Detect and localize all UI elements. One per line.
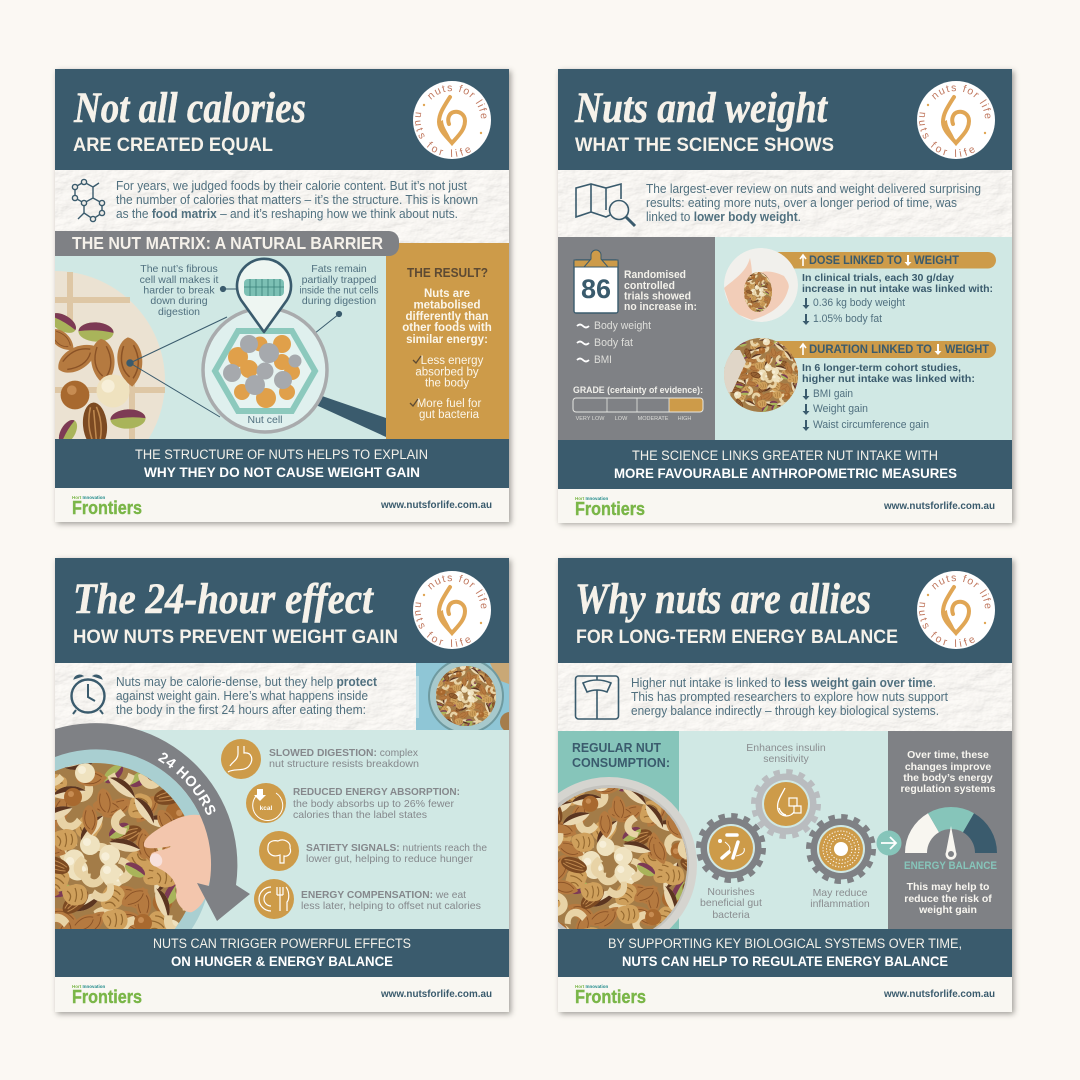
intro text: energy balance indirectly – through key biological systems. bbox=[631, 704, 939, 718]
footer: Frontiers bbox=[575, 987, 646, 1007]
duration results: BMI gain bbox=[813, 388, 853, 400]
header band bbox=[55, 69, 509, 170]
arrow: gears to gauge bbox=[876, 830, 902, 856]
footer: Hort Innovation bbox=[72, 495, 105, 500]
footer: www.nutsforlife.com.au bbox=[380, 988, 492, 1000]
grey trials panel bbox=[558, 237, 715, 440]
no-change list bbox=[577, 320, 651, 366]
intro text bbox=[646, 182, 981, 224]
photo: bowl of nuts bbox=[416, 663, 509, 730]
trials text: no increase in: bbox=[624, 301, 697, 313]
conclusion band: THE SCIENCE LINKS GREATER NUT INTAKE WITH bbox=[632, 448, 938, 463]
panel: the result: Less energy bbox=[421, 355, 484, 367]
conclusion band: MORE FAVOURABLE ANTHROPOMETRIC MEASURES bbox=[614, 466, 957, 481]
outcome text: Over time, these bbox=[907, 749, 989, 761]
panel: not all calories bbox=[54, 68, 514, 528]
no-change list: Body fat bbox=[594, 337, 633, 349]
GRADE scale: MODERATE bbox=[638, 416, 669, 422]
intro text: the number of calories that matters – it’s the structure. This is known bbox=[116, 193, 478, 207]
footer: Hort Innovation bbox=[72, 984, 105, 989]
panel: the result: similar energy: bbox=[406, 334, 488, 346]
callout: fats trapped: Fats remain bbox=[311, 263, 367, 275]
step: satiety signals bbox=[259, 831, 487, 871]
gear labels: bacteria bbox=[712, 909, 750, 921]
header band bbox=[55, 558, 509, 663]
duration pill bbox=[760, 341, 996, 358]
section heading tab: THE NUT MATRIX: A NATURAL BARRIER bbox=[72, 233, 383, 253]
callout: fibrous cell wall: The nut’s fibrous bbox=[140, 263, 218, 275]
outcome text: regulation systems bbox=[900, 783, 996, 795]
trials text bbox=[624, 269, 697, 313]
duration results bbox=[802, 388, 929, 431]
outcome note bbox=[904, 881, 992, 916]
title: Nuts and weight bbox=[574, 85, 829, 132]
step: satiety signals: SATIETY SIGNALS: nutrients reach the bbox=[306, 842, 487, 854]
conclusion band: NUTS CAN TRIGGER POWERFUL EFFECTS bbox=[153, 936, 411, 951]
gauge: energy balance: ENERGY BALANCE bbox=[904, 860, 997, 872]
gear labels bbox=[700, 742, 870, 921]
icon: weighing scale bbox=[576, 676, 618, 719]
footer bbox=[55, 488, 509, 522]
no-change list: Body weight bbox=[594, 320, 651, 332]
logo: nuts for life bbox=[917, 81, 995, 159]
intro text: For years, we judged foods by their calorie content. But it’s not just bbox=[116, 179, 467, 193]
footer: Hort Innovation bbox=[575, 496, 608, 501]
label: nut cell: Nut cell bbox=[247, 414, 283, 426]
gauge: energy balance bbox=[904, 807, 997, 872]
regular nut consumption panel: CONSUMPTION: bbox=[572, 756, 670, 770]
icon: molecule bbox=[72, 179, 105, 222]
dose results: 1.05% body fat bbox=[813, 313, 882, 325]
subtitle: FOR LONG-TERM ENERGY BALANCE bbox=[576, 627, 898, 648]
photo: bowl with hand bbox=[55, 723, 250, 929]
leader lines bbox=[127, 286, 342, 417]
dose pill: WEIGHT bbox=[914, 255, 959, 267]
footer: Hort Innovation bbox=[575, 984, 608, 989]
conclusion band bbox=[558, 440, 1012, 489]
title: Not all calories bbox=[73, 85, 306, 132]
intro text: Nuts may be calorie-dense, but they help protect bbox=[116, 675, 378, 689]
intro text bbox=[116, 675, 378, 717]
photo: hand holding nuts bbox=[723, 248, 798, 327]
logo: nuts for life: nuts for life bbox=[415, 112, 471, 157]
header band bbox=[558, 558, 1012, 663]
intro text: as the food matrix – and it’s reshaping how we think about nuts. bbox=[116, 207, 458, 221]
GRADE scale: LOW bbox=[615, 416, 628, 422]
step: slowed digestion: nut structure resists breakdown bbox=[269, 758, 419, 770]
conclusion band: ON HUNGER & ENERGY BALANCE bbox=[171, 954, 393, 969]
trials text: Randomised bbox=[624, 269, 686, 281]
outcome note: This may help to bbox=[907, 881, 989, 893]
hexagon cell bbox=[215, 331, 315, 411]
dose text bbox=[802, 272, 993, 295]
gear labels: sensitivity bbox=[763, 753, 810, 765]
logo: nuts for life: nuts for life bbox=[428, 84, 487, 118]
intro text: against weight gain. Here’s what happens inside bbox=[116, 689, 368, 703]
step: slowed digestion bbox=[221, 739, 419, 779]
footer: Frontiers bbox=[575, 499, 645, 519]
footer: www.nutsforlife.com.au bbox=[883, 500, 995, 512]
gear: gut bacteria bbox=[698, 816, 764, 880]
grey outcome panel bbox=[888, 731, 1012, 929]
callout: fibrous cell wall: digestion bbox=[158, 306, 200, 318]
conclusion band: WHY THEY DO NOT CAUSE WEIGHT GAIN bbox=[144, 465, 420, 480]
duration results: Weight gain bbox=[813, 403, 868, 415]
gear labels: beneficial gut bbox=[700, 897, 762, 909]
outcome note: reduce the risk of bbox=[904, 893, 992, 905]
footer: Frontiers bbox=[72, 498, 142, 518]
icon: map and magnifier bbox=[576, 184, 635, 226]
panel: the result: absorbed by bbox=[415, 366, 479, 378]
panel: the result bbox=[386, 243, 509, 439]
callout: fibrous cell wall: harder to break bbox=[143, 284, 215, 296]
logo: nuts for life: nuts for life bbox=[919, 602, 975, 647]
panel: the result: Nuts are bbox=[424, 288, 470, 300]
conclusion band: THE STRUCTURE OF NUTS HELPS TO EXPLAIN bbox=[135, 447, 428, 462]
intro text: This has prompted researchers to explore how nuts support bbox=[631, 690, 949, 704]
header band bbox=[558, 69, 1012, 170]
dose results bbox=[802, 297, 905, 325]
dose pill: DOSE LINKED TO bbox=[809, 255, 902, 267]
step: energy compensation bbox=[254, 879, 481, 919]
arrow: 24 hours bbox=[55, 723, 250, 921]
gear labels: May reduce bbox=[813, 887, 868, 899]
panel: the result: More fuel for bbox=[417, 398, 481, 410]
outcome note: weight gain bbox=[918, 904, 977, 916]
icon: clipboard 86 bbox=[574, 250, 618, 313]
conclusion band bbox=[55, 439, 509, 488]
logo: nuts for life bbox=[413, 571, 491, 649]
callout: fats trapped bbox=[300, 263, 378, 307]
panel: why nuts are allies bbox=[556, 556, 1018, 1018]
step: satiety signals: lower gut, helping to reduce hunger bbox=[306, 853, 473, 865]
mint background bbox=[679, 731, 888, 929]
no-change list: BMI bbox=[594, 354, 612, 366]
dose results: 0.36 kg body weight bbox=[813, 297, 905, 309]
step: reduced energy absorption: kcal bbox=[260, 805, 273, 812]
mint findings panel bbox=[712, 237, 1012, 440]
outcome text: the body’s energy bbox=[903, 772, 993, 784]
step: reduced energy absorption: REDUCED ENERGY ABSORPTION: bbox=[293, 786, 460, 798]
footer: www.nutsforlife.com.au bbox=[380, 499, 492, 511]
logo: nuts for life: nuts for life bbox=[428, 574, 487, 608]
GRADE scale: VERY LOW bbox=[576, 416, 605, 422]
intro text: linked to lower body weight. bbox=[646, 210, 801, 224]
step: energy compensation: ENERGY COMPENSATION: we eat bbox=[301, 889, 466, 901]
duration text: In 6 longer-term cohort studies, bbox=[802, 362, 961, 374]
icon: clipboard 86: 86 bbox=[581, 274, 611, 304]
logo: nuts for life bbox=[917, 571, 995, 649]
icon: alarm clock bbox=[72, 675, 104, 714]
intro text: results: eating more nuts, over a longer period of time, was bbox=[646, 196, 957, 210]
step: energy compensation: less later, helping to offset nut calories bbox=[301, 900, 481, 912]
panel: the result: differently than bbox=[405, 311, 489, 323]
gear labels: Enhances insulin bbox=[746, 742, 826, 754]
footer bbox=[55, 977, 509, 1012]
intro text bbox=[631, 676, 949, 718]
regular nut consumption panel: REGULAR NUT bbox=[572, 741, 661, 755]
logo: nuts for life: nuts for life bbox=[932, 84, 991, 118]
pin: cell wall fibres bbox=[237, 259, 291, 332]
callout: fibrous cell wall bbox=[140, 263, 218, 318]
subtitle: WHAT THE SCIENCE SHOWS bbox=[575, 135, 834, 156]
dose text: increase in nut intake was linked with: bbox=[802, 283, 993, 295]
logo: nuts for life: nuts for life bbox=[415, 602, 471, 647]
hand bbox=[144, 815, 213, 912]
trials text: controlled bbox=[624, 280, 675, 292]
GRADE scale bbox=[573, 385, 703, 422]
mint background bbox=[55, 730, 509, 929]
duration text: higher nut intake was linked with: bbox=[802, 373, 975, 385]
title: Why nuts are allies bbox=[575, 576, 871, 623]
logo: nuts for life: nuts for life bbox=[932, 574, 991, 608]
intro text: the body in the first 24 hours after eating them: bbox=[116, 703, 366, 717]
duration text bbox=[802, 362, 975, 385]
conclusion band: NUTS CAN HELP TO REGULATE ENERGY BALANCE bbox=[622, 954, 948, 969]
panel: the result: gut bacteria bbox=[419, 409, 480, 421]
step: reduced energy absorption: the body absorbs up to 26% fewer bbox=[293, 798, 454, 810]
duration pill: WEIGHT bbox=[945, 344, 989, 356]
panel: the result: metabolised bbox=[413, 300, 481, 312]
callout: fats trapped: during digestion bbox=[302, 295, 376, 307]
panel: 24-hour effect bbox=[54, 556, 514, 1018]
panel: the result: the body bbox=[425, 378, 469, 390]
magnifier and nut cell bbox=[203, 259, 386, 437]
GRADE scale: HIGH bbox=[678, 416, 691, 422]
intro text: The largest-ever review on nuts and weight delivered surprising bbox=[646, 182, 981, 196]
conclusion band bbox=[558, 929, 1012, 977]
dose pill bbox=[760, 252, 996, 268]
logo: nuts for life bbox=[413, 81, 491, 159]
callout: fats trapped: inside the nut cells bbox=[300, 284, 378, 296]
regular nut consumption panel bbox=[558, 731, 679, 929]
callout: fats trapped: partially trapped bbox=[302, 274, 377, 286]
mint background bbox=[55, 256, 386, 439]
footer: www.nutsforlife.com.au bbox=[883, 988, 995, 1000]
conclusion band: BY SUPPORTING KEY BIOLOGICAL SYSTEMS OVER TIME, bbox=[608, 936, 962, 951]
arrow label: 24 HOURS bbox=[158, 752, 216, 815]
gear labels: Nourishes bbox=[707, 886, 755, 898]
conclusion band bbox=[55, 929, 509, 977]
outcome text bbox=[900, 749, 996, 795]
panel: nuts and weight bbox=[556, 68, 1018, 528]
photo: plate of nuts bbox=[55, 271, 165, 439]
intro text: Higher nut intake is linked to less weight gain over time. bbox=[631, 676, 936, 690]
subtitle: HOW NUTS PREVENT WEIGHT GAIN bbox=[73, 627, 398, 648]
gear labels: inflammation bbox=[810, 898, 870, 910]
footer bbox=[558, 977, 1012, 1012]
GRADE scale: GRADE (certainty of evidence): bbox=[573, 385, 703, 396]
callout: fibrous cell wall: cell wall makes it bbox=[140, 274, 218, 286]
footer bbox=[558, 489, 1012, 523]
trials text: trials showed bbox=[624, 290, 691, 302]
outcome text: changes improve bbox=[905, 761, 991, 773]
photo: scattered nuts bbox=[724, 338, 798, 412]
logo: nuts for life: nuts for life bbox=[919, 112, 975, 157]
step: slowed digestion: SLOWED DIGESTION: complex bbox=[269, 747, 419, 759]
step: reduced energy absorption bbox=[246, 783, 460, 823]
footer: Frontiers bbox=[72, 987, 142, 1007]
duration results: Waist circumference gain bbox=[813, 419, 929, 431]
title: The 24-hour effect bbox=[73, 576, 375, 623]
duration pill: DURATION LINKED TO bbox=[809, 344, 932, 356]
panel: the result: other foods with bbox=[402, 322, 492, 334]
callout: fibrous cell wall: down during bbox=[150, 295, 208, 307]
step: reduced energy absorption: calories than the label states bbox=[293, 809, 427, 821]
gear: inflammation bbox=[808, 816, 874, 882]
photo: plate of nuts bbox=[558, 777, 697, 929]
panel: the result: THE RESULT? bbox=[407, 265, 488, 280]
dose text: In clinical trials, each 30 g/day bbox=[802, 272, 954, 284]
intro text bbox=[116, 179, 478, 221]
gear: insulin sensitivity bbox=[754, 772, 818, 836]
subtitle: ARE CREATED EQUAL bbox=[73, 135, 273, 156]
